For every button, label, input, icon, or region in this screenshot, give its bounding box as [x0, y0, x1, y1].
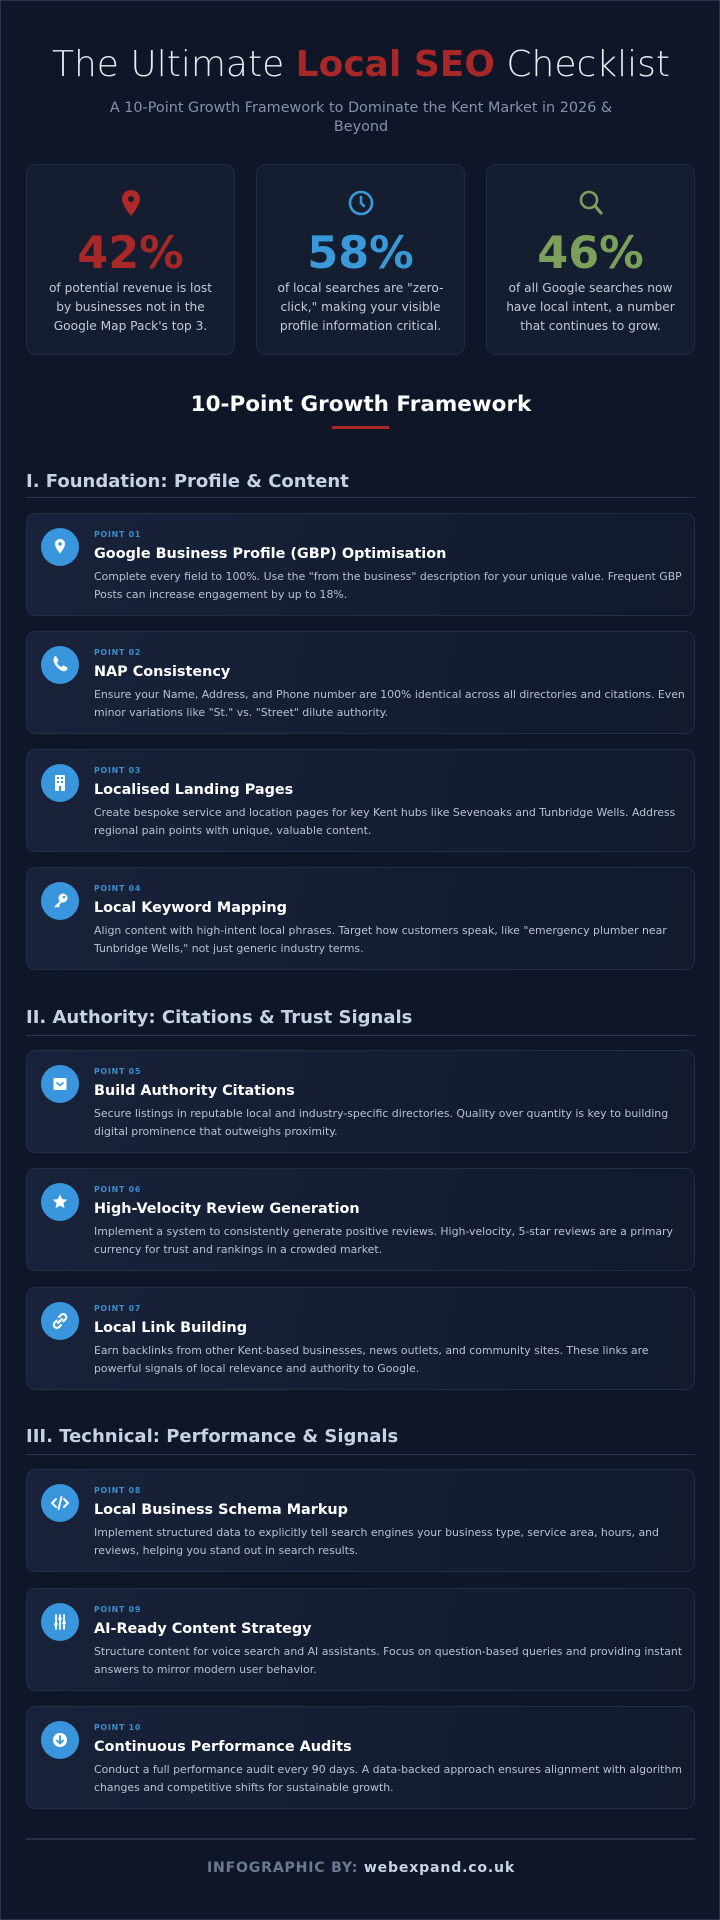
- stat text: of potential revenue is lost: [49, 281, 212, 295]
- card: point 02: POINT 02: [94, 648, 141, 657]
- card: point 07: Earn backlinks from other Kent-based businesses, news outlets, and community sites. These links are: [94, 1344, 649, 1357]
- stat text: [49, 281, 212, 333]
- card: point 07: POINT 07: [94, 1304, 141, 1313]
- icon: magnifier: [580, 190, 603, 215]
- card: point 05: Secure listings in reputable local and industry-specific directories. Quality over quantity is key to building: [94, 1107, 668, 1120]
- card: point 09: Structure content for voice search and AI assistants. Focus on question-based queries and providing instant: [94, 1645, 682, 1658]
- stat text: have local intent, a number: [506, 300, 675, 314]
- card title: Continuous Performance Audits: [94, 1739, 352, 1755]
- card: point 03: [26, 749, 695, 852]
- card: point 07: powerful signals of local relevance and authority to Google.: [94, 1362, 419, 1374]
- card: point 10: Conduct a full performance audit every 90 days. A data-backed approach ensures alignment with algorithm: [94, 1763, 682, 1776]
- stat text: of all Google searches now: [509, 281, 672, 295]
- card title: Local Link Building: [94, 1320, 247, 1336]
- card title: Build Authority Citations: [94, 1083, 295, 1099]
- icon: code: [41, 1484, 79, 1522]
- card: point 09: answers to mirror modern user behavior.: [94, 1662, 317, 1676]
- card: point 10: [26, 1706, 695, 1809]
- subtitle: [110, 100, 612, 135]
- card: point 08: reviews, helping you stand out in search results.: [94, 1544, 358, 1556]
- stat text: by businesses not in the: [56, 300, 205, 314]
- card: point 04: Tunbridge Wells," not just generic industry terms.: [94, 942, 364, 954]
- card: point 04: [26, 867, 695, 970]
- card title: AI-Ready Content Strategy: [94, 1621, 312, 1637]
- card: point 06: [26, 1168, 695, 1271]
- stat card: 58%: [256, 164, 465, 355]
- card: point 05: digital prominence that outweighs proximity.: [94, 1124, 338, 1138]
- title: The Ultimate Local SEO Checklist: [52, 44, 670, 85]
- footer: INFOGRAPHIC BY: webexpand.co.uk: [207, 1860, 515, 1876]
- subtitle: Beyond: [334, 119, 388, 135]
- framework heading: 10-Point Growth Framework: [191, 392, 531, 417]
- stat text: [506, 281, 675, 333]
- card: point 02: minor variations like "St." vs. "Street" dilute authority.: [94, 706, 388, 718]
- card: point 09: POINT 09: [94, 1605, 141, 1614]
- icon: link: [41, 1302, 79, 1340]
- card: point 06: POINT 06: [94, 1185, 141, 1194]
- icon: map pin: [122, 190, 140, 216]
- stat card: 42%: [26, 164, 235, 355]
- card: point 08: [26, 1469, 695, 1572]
- stat text: [277, 281, 444, 333]
- icon: download circle: [41, 1721, 79, 1759]
- stat card: 46%: [486, 164, 695, 355]
- card: point 10: POINT 10: [94, 1723, 141, 1732]
- stat number: 58%: [307, 228, 414, 279]
- card: point 04: POINT 04: [94, 884, 141, 893]
- stat number: 42%: [77, 228, 184, 279]
- icon: star: [41, 1183, 79, 1221]
- stat text: profile information critical.: [280, 319, 441, 333]
- section heading III: III. Technical: Performance & Signals: [26, 1426, 398, 1447]
- card: point 06: currency for trust and rankings in a crowded market.: [94, 1242, 382, 1256]
- card: point 04: Align content with high-intent local phrases. Target how customers speak, like "emergency plumber near: [94, 924, 667, 937]
- card: point 03: POINT 03: [94, 766, 141, 775]
- icon: clock: [348, 190, 374, 216]
- subtitle: A 10-Point Growth Framework to Dominate the Kent Market in 2026 &: [110, 100, 612, 116]
- card: point 10: changes and competitive shifts for sustainable growth.: [94, 1780, 394, 1794]
- stat text: Google Map Pack's top 3.: [54, 319, 207, 333]
- card: point 03: regional pain points with unique, valuable content.: [94, 824, 371, 836]
- stat text: click," making your visible: [281, 300, 440, 314]
- card: point 02: [26, 631, 695, 734]
- card: point 01: Complete every field to 100%. Use the "from the business" description for your unique value. Frequent GBP: [94, 570, 682, 583]
- card: point 08: POINT 08: [94, 1486, 141, 1495]
- icon: pin: [41, 528, 79, 566]
- stat text: that continues to grow.: [520, 319, 661, 333]
- icon: inbox: [41, 1065, 79, 1103]
- icon: building: [41, 764, 79, 802]
- card: point 05: [26, 1050, 695, 1153]
- card: point 06: Implement a system to consistently generate positive reviews. High-velocity, 5-star reviews are a primary: [94, 1225, 673, 1238]
- card: point 08: Implement structured data to explicitly tell search engines your business type, service area, hours, and: [94, 1526, 659, 1539]
- stat text: of local searches are "zero-: [277, 281, 444, 295]
- icon: phone: [41, 646, 79, 684]
- section heading I: I. Foundation: Profile & Content: [26, 471, 349, 492]
- card: point 05: POINT 05: [94, 1067, 141, 1076]
- card: point 07: [26, 1287, 695, 1390]
- section heading II: II. Authority: Citations & Trust Signals: [26, 1007, 412, 1028]
- card: point 01: Posts can increase engagement by up to 18%.: [94, 588, 347, 600]
- card: point 03: Create bespoke service and location pages for key Kent hubs like Sevenoaks and Tunbridge Wells. Address: [94, 806, 675, 819]
- card: point 01: [26, 513, 695, 616]
- card title: Localised Landing Pages: [94, 782, 293, 798]
- stat number: 46%: [537, 228, 644, 279]
- card title: NAP Consistency: [94, 664, 230, 680]
- icon: key: [41, 882, 79, 920]
- card: point 09: [26, 1588, 695, 1691]
- card title: Local Business Schema Markup: [94, 1502, 348, 1518]
- card: point 02: Ensure your Name, Address, and Phone number are 100% identical across all directories and citations. Even: [94, 688, 685, 701]
- card title: Google Business Profile (GBP) Optimisation: [94, 546, 446, 562]
- card: point 01: POINT 01: [94, 530, 141, 539]
- card title: Local Keyword Mapping: [94, 900, 287, 916]
- card title: High-Velocity Review Generation: [94, 1201, 360, 1217]
- icon: sliders: [41, 1603, 79, 1641]
